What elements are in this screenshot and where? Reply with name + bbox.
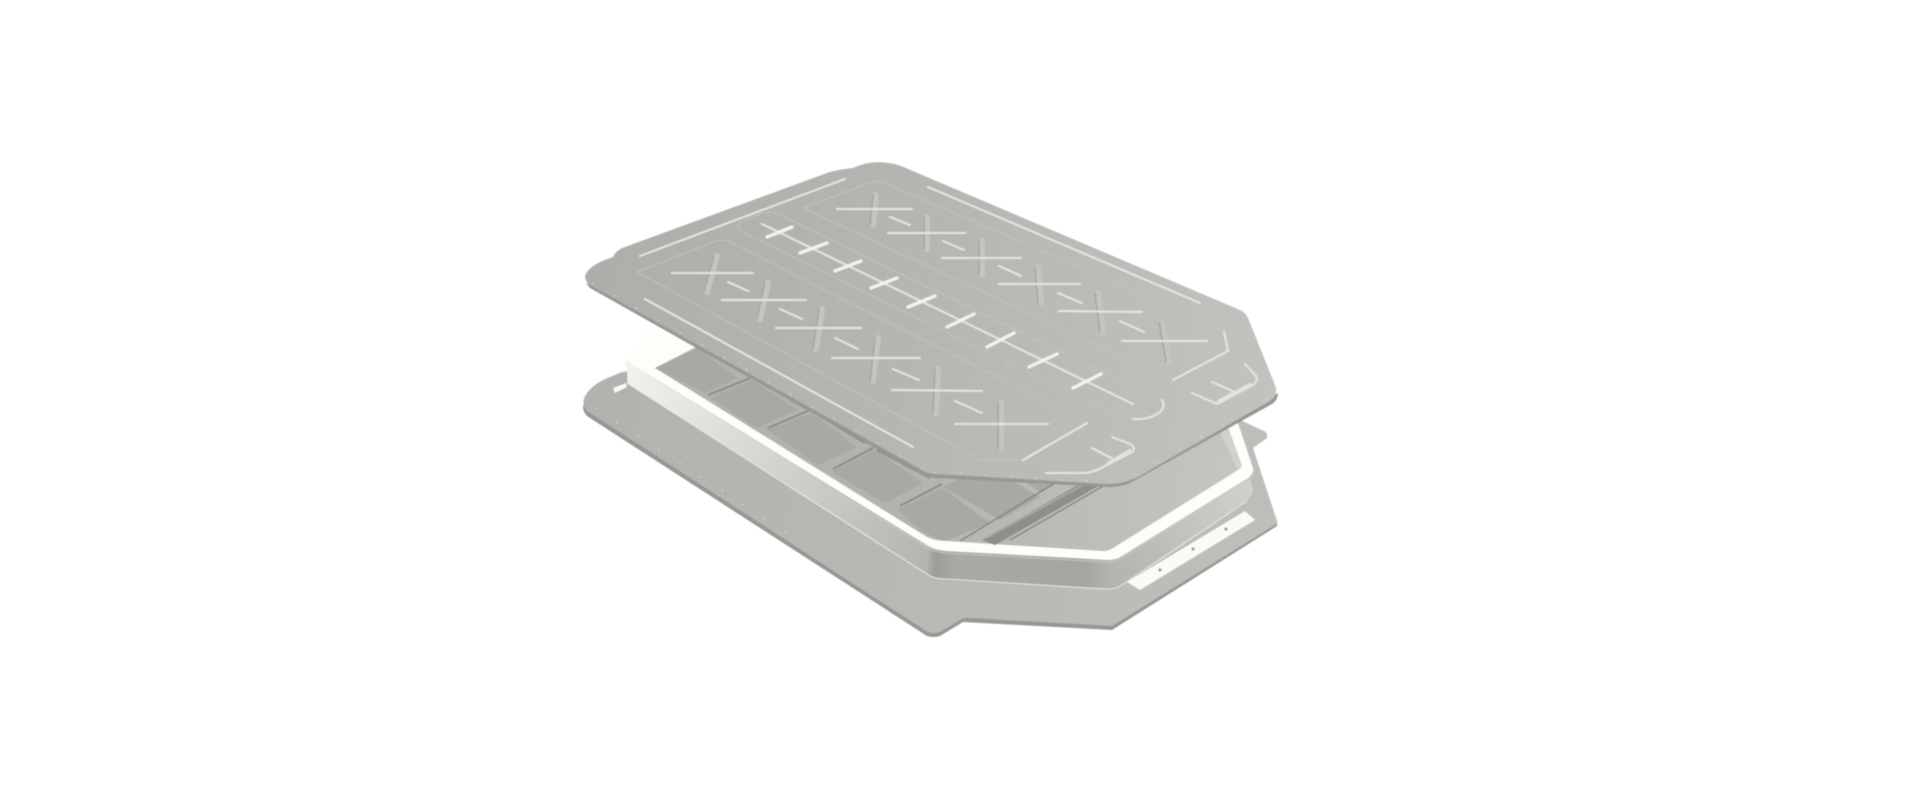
- edge fastener dots: [592, 283, 1268, 482]
- base slot: [613, 383, 627, 393]
- tray floor: [655, 345, 1242, 551]
- plate body: [585, 162, 1276, 484]
- upper cover plate: [585, 162, 1278, 487]
- corner hook ridges: right: [1192, 364, 1257, 404]
- tray wall: long side: [625, 360, 945, 578]
- tray wall: front: [927, 548, 1115, 590]
- cell separators: [698, 347, 942, 506]
- central ridge with cross slots: [762, 224, 1133, 404]
- panel outlines: [637, 181, 1230, 461]
- perimeter ridges: [640, 179, 1228, 460]
- tray wall: right side: [1108, 477, 1253, 590]
- white mounting strip: [1127, 511, 1255, 590]
- mounting holes along base edge: [595, 408, 800, 541]
- lower tray assembly: [583, 330, 1277, 637]
- X stiffeners: lower panel: [672, 256, 1048, 449]
- corner hook ridges: front: [1046, 437, 1134, 473]
- central cooling channel: [960, 478, 1110, 545]
- white top flange: [625, 330, 1253, 560]
- flange seam: [800, 468, 1254, 562]
- far wall inner face: [1219, 427, 1242, 470]
- battery cells: [655, 347, 1065, 541]
- base plate: [583, 370, 1277, 637]
- wall base seam: [627, 383, 1247, 589]
- X stiffeners: upper panel: [837, 195, 1207, 362]
- plate edge thickness: [586, 283, 1278, 487]
